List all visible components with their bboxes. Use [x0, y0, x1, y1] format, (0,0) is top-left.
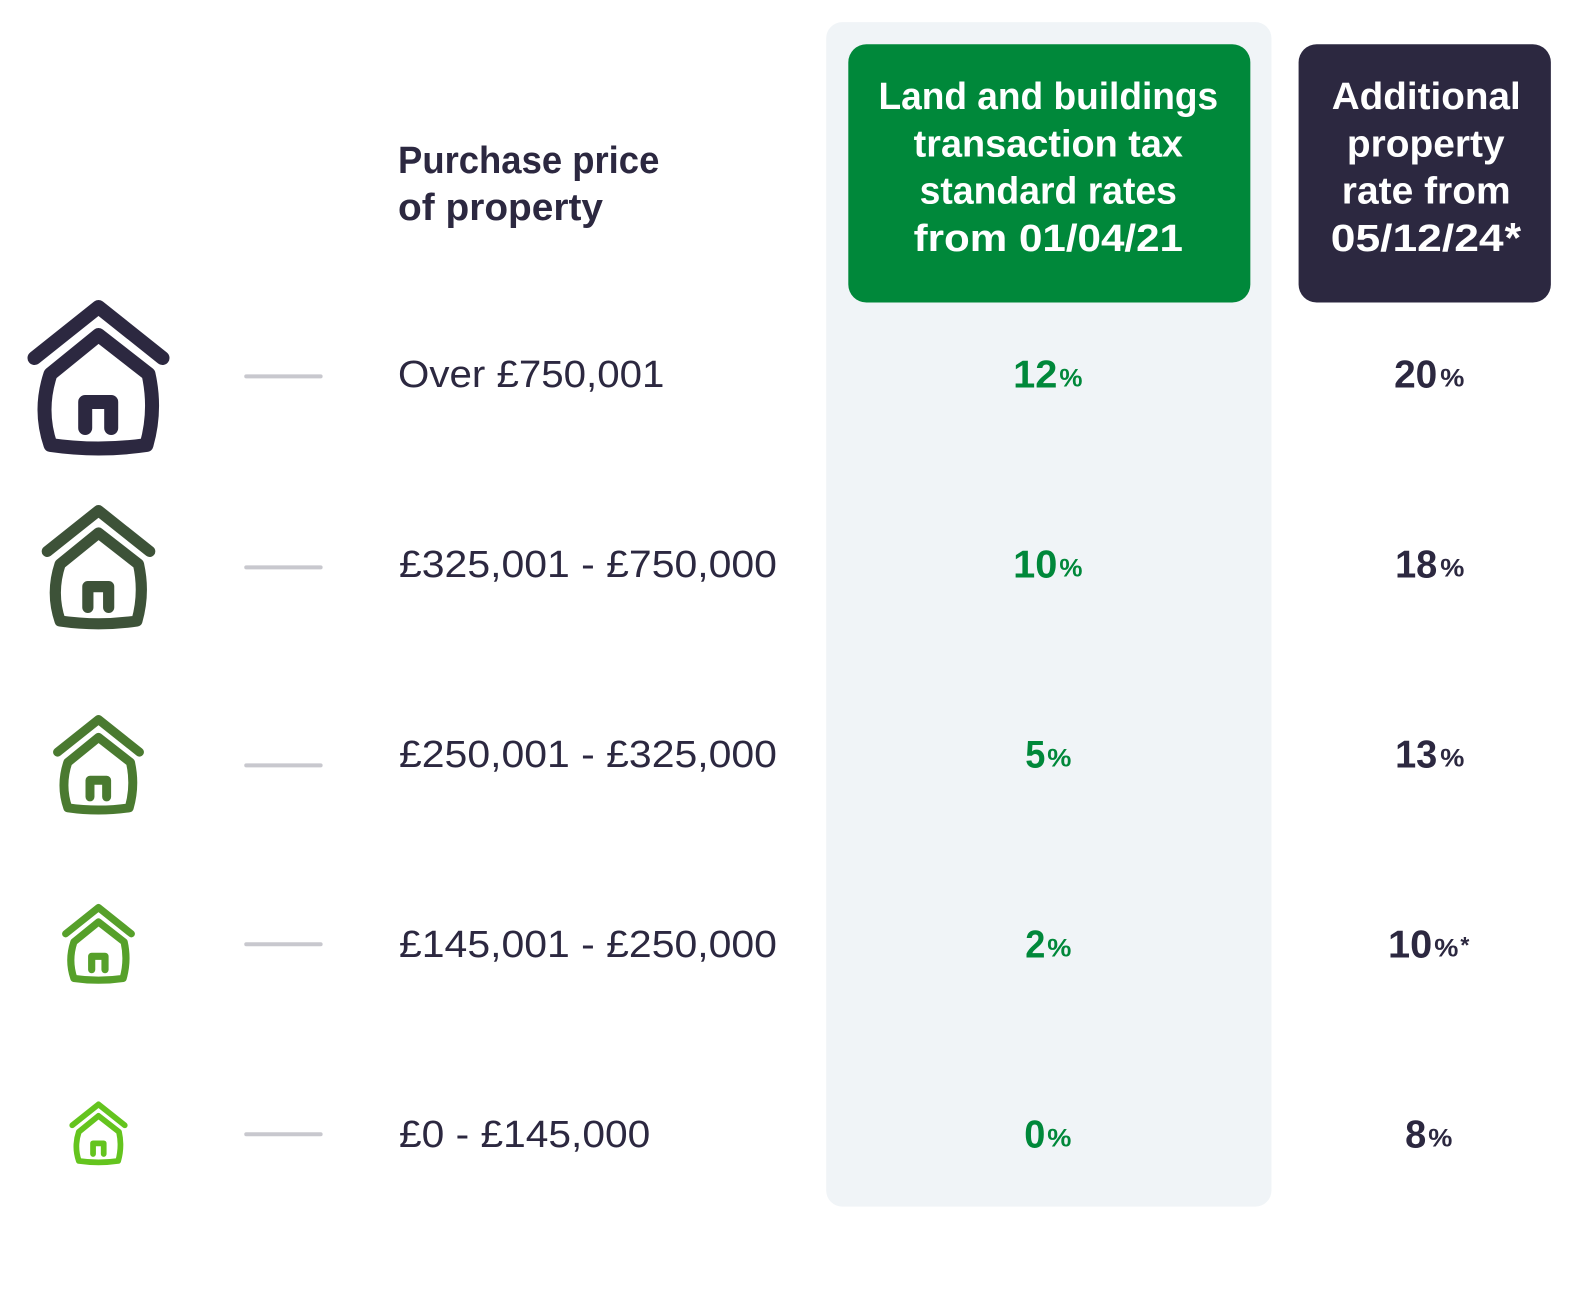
additional rate: 10% with asterisk: % — [1434, 934, 1458, 962]
standard rate: 2%: 2 — [1025, 923, 1045, 966]
standard rate: 10%: 10 — [1013, 543, 1057, 586]
standard rate: 12%: 12 — [1013, 353, 1057, 396]
price band: over 750,001: Over £750,001 — [398, 353, 664, 396]
additional rate: 10% with asterisk: * — [1460, 932, 1469, 958]
heading panel: standard rates — [848, 44, 1250, 303]
icon: house, largest — [34, 307, 162, 448]
additional rate: 20% — [1394, 353, 1464, 396]
additional rate: 18%: % — [1440, 554, 1464, 582]
standard rate: 10% — [1013, 543, 1082, 586]
standard rate: 2%: % — [1047, 934, 1071, 962]
heading panel: additional property rate — [1299, 44, 1551, 303]
panel: standard rates column background — [826, 22, 1271, 1207]
additional rate: 8%: % — [1428, 1124, 1452, 1152]
heading panel: additional property rate: 05/12/24 — [1331, 217, 1505, 260]
standard rate: 5% — [1025, 733, 1071, 776]
standard rate: 2% — [1025, 923, 1071, 966]
additional rate: 13%: 13 — [1395, 733, 1437, 776]
standard rate: 5%: % — [1047, 744, 1071, 772]
heading panel: additional property rate: Additional — [1332, 75, 1521, 118]
additional rate: 18% — [1395, 543, 1464, 586]
standard rate: 0% — [1024, 1113, 1071, 1156]
additional rate: 13%: % — [1440, 744, 1464, 772]
icon: house, fourth — [66, 908, 131, 980]
heading panel: standard rates: standard rates — [920, 170, 1177, 213]
additional rate: 8% — [1405, 1113, 1452, 1156]
heading: purchase price of property — [398, 139, 659, 229]
additional rate: 10% with asterisk — [1388, 923, 1469, 966]
standard rate: 0%: 0 — [1024, 1113, 1045, 1156]
heading: purchase price of property: of property — [398, 186, 604, 229]
heading panel: standard rates: Land and buildings — [878, 75, 1218, 118]
additional rate: 13% — [1395, 733, 1464, 776]
additional rate: 20%: 20 — [1394, 353, 1437, 396]
additional rate: 18%: 18 — [1395, 543, 1437, 586]
icon: house, second — [47, 511, 150, 624]
price band: 145,001 to 250,000: £145,001 - £250,000 — [399, 923, 777, 966]
icon: house, smallest — [72, 1104, 125, 1162]
standard rate: 5%: 5 — [1025, 733, 1045, 776]
additional rate: 20%: % — [1440, 364, 1464, 392]
heading panel: additional property rate: rate from — [1342, 170, 1511, 213]
heading panel: standard rates: transaction tax — [914, 122, 1183, 165]
standard rate: 12% — [1013, 353, 1082, 396]
price band: 250,001 to 325,000: £250,001 - £325,000 — [399, 733, 777, 776]
heading panel: additional property rate: * — [1505, 214, 1522, 261]
standard rate: 0%: % — [1047, 1124, 1071, 1152]
heading: purchase price of property: Purchase price — [398, 139, 659, 182]
icon: house, third — [58, 719, 139, 810]
heading panel: additional property rate: property — [1347, 122, 1505, 165]
additional rate: 8%: 8 — [1405, 1113, 1426, 1156]
standard rate: 10%: % — [1059, 554, 1082, 582]
additional rate: 10% with asterisk: 10 — [1388, 923, 1432, 966]
price band: 325,001 to 750,000: £325,001 - £750,000 — [399, 543, 777, 586]
standard rate: 12%: % — [1059, 364, 1082, 392]
price band: 0 to 145,000: £0 - £145,000 — [399, 1113, 650, 1156]
heading panel: standard rates: from 01/04/21 — [914, 217, 1183, 260]
